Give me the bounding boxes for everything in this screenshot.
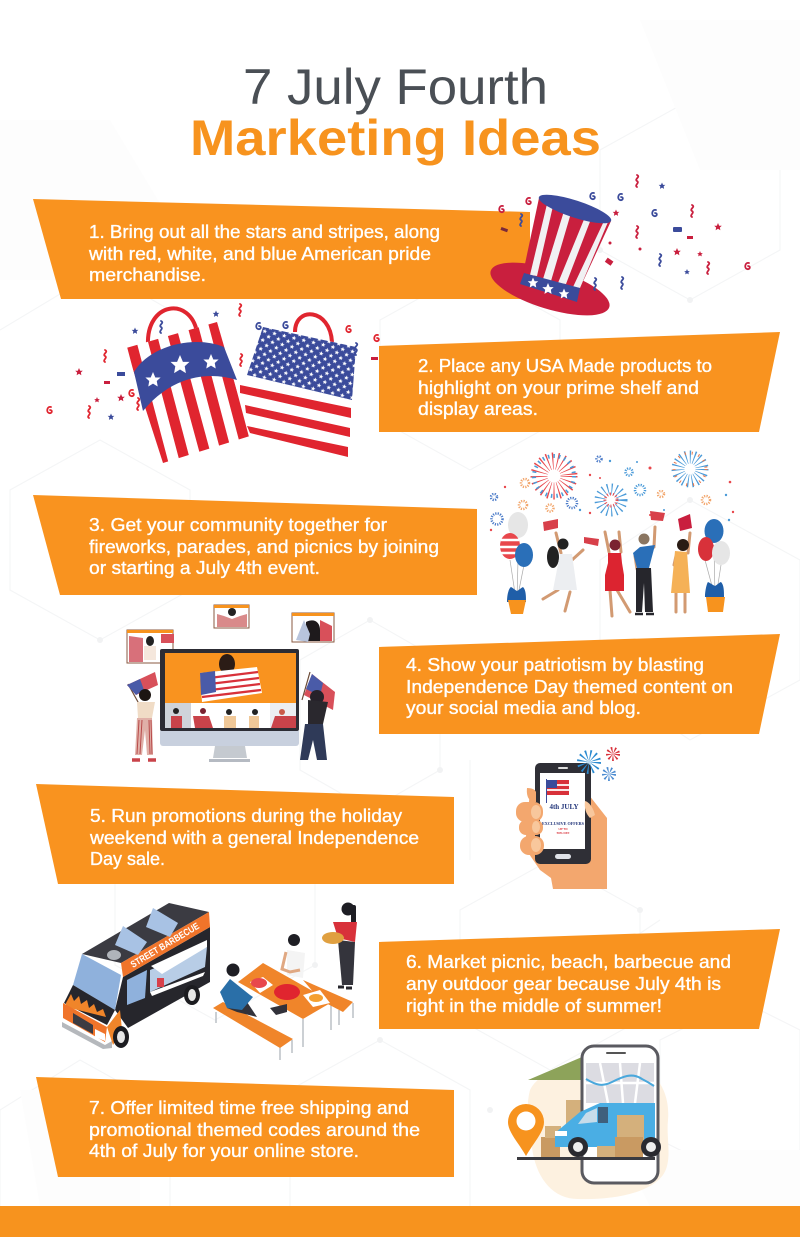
icon: uncle sam hat with confetti — [485, 175, 750, 326]
icon: shopping bags with confetti — [47, 304, 379, 470]
footer bar — [0, 1206, 800, 1237]
panel: idea 2: highlight on your prime shelf and — [418, 378, 699, 398]
title: Marketing Ideas — [190, 110, 601, 166]
person: seated white shirt — [270, 934, 305, 1015]
panel: idea 5: Day sale. — [90, 849, 165, 869]
person: seated blue — [220, 964, 257, 1017]
icon: delivery van on phone with location pin — [508, 1046, 669, 1199]
panel: idea 6 — [379, 929, 780, 1029]
icon: fireworks and celebrating crowd — [490, 453, 734, 616]
panel: idea 2: display areas. — [418, 399, 538, 419]
title: 7 July Fourth — [243, 59, 548, 115]
balloons left — [500, 512, 533, 614]
person: woman in red dress — [605, 532, 630, 616]
monitor — [160, 649, 299, 762]
truck — [62, 903, 210, 1049]
panel: idea 4: your social media and blog. — [406, 698, 641, 718]
icon: hand holding phone with July 4th offer: UP TO — [558, 827, 568, 831]
panel: idea 7: 4th of July for your online store. — [89, 1141, 359, 1161]
panel: idea 2: 2. Place any USA Made products to — [418, 356, 712, 376]
panel: idea 4: 4. Show your patriotism by blasting — [406, 655, 704, 675]
icon: hand holding phone with July 4th offer: 50% OFF — [557, 831, 570, 835]
icon: hand holding phone with July 4th offer — [516, 750, 616, 889]
panel: idea 1: with red, white, and blue American pride — [88, 244, 431, 264]
panel: idea 6: 6. Market picnic, beach, barbecue and — [406, 952, 731, 972]
panel: idea 1: 1. Bring out all the stars and stripes, along — [89, 222, 440, 242]
panel: idea 3: 3. Get your community together for — [89, 515, 387, 535]
icon: hand holding phone with July 4th offer: 4th JULY — [549, 803, 579, 811]
icon: food truck and picnic table — [62, 902, 357, 1060]
balloons right — [698, 519, 730, 612]
person: left flag holder — [127, 672, 158, 760]
icon: hand holding phone with July 4th offer: EXCLUSIVE OFFERS — [542, 821, 585, 826]
panel: idea 7: promotional themed codes around the — [89, 1120, 420, 1140]
panel: idea 3 — [33, 495, 477, 595]
panel: idea 5: weekend with a general Independence — [89, 828, 419, 848]
panel: idea 5: 5. Run promotions during the holiday — [90, 806, 402, 826]
person: man in blue shirt — [633, 511, 665, 614]
panel: idea 7: 7. Offer limited time free shipping and — [89, 1098, 409, 1118]
person: right flag holder — [300, 672, 335, 760]
person: woman in white dress — [543, 519, 599, 611]
icon: computer monitor with social posts and flag holders — [127, 605, 335, 762]
picnic table — [213, 963, 353, 1060]
panel: idea 5 — [36, 784, 454, 884]
panel: idea 6: any outdoor gear because July 4th is — [406, 974, 721, 994]
panel: idea 3: fireworks, parades, and picnics by joining — [89, 537, 439, 557]
person: woman in yellow dress — [671, 514, 692, 612]
panel: idea 6: right in the middle of summer! — [406, 996, 662, 1016]
panel: idea 4 — [379, 634, 780, 734]
panel: idea 1 — [33, 199, 530, 299]
panel: idea 2 — [379, 332, 780, 432]
title — [190, 59, 601, 166]
panel: idea 4: Independence Day themed content on — [406, 677, 733, 697]
panel: idea 7 — [36, 1077, 454, 1177]
person: standing server — [322, 902, 357, 988]
panel: idea 3: or starting a July 4th event. — [89, 558, 320, 578]
truck: STREET BARBECUE — [129, 921, 201, 971]
panel: idea 1: merchandise. — [89, 265, 206, 285]
